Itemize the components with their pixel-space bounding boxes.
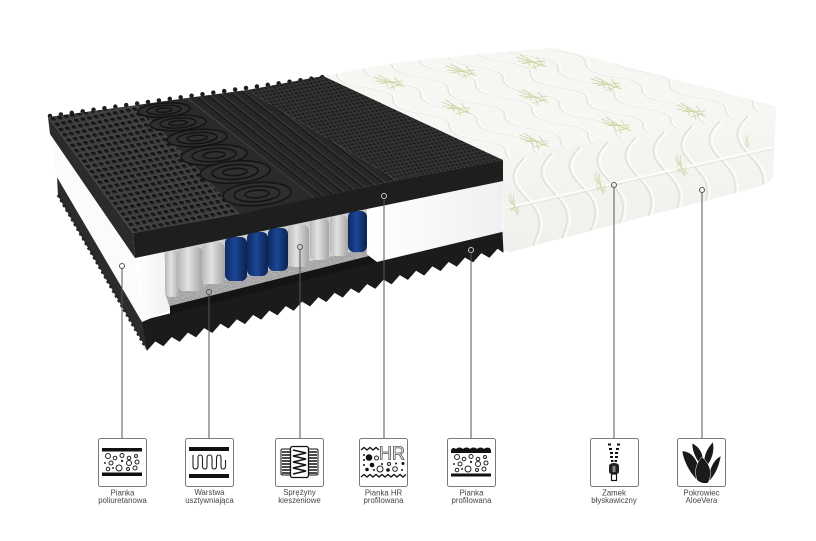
label: Pianka profilowana: profilowana bbox=[452, 496, 492, 505]
label: Warstwa usztywniająca: Warstwa bbox=[194, 488, 225, 497]
white polyurethane foam front block bbox=[136, 252, 170, 322]
callout: polyurethane foam bbox=[120, 264, 124, 438]
label: Zamek błyskawiczny: błyskawiczny bbox=[591, 496, 637, 505]
callout: aloe cover bbox=[700, 188, 704, 438]
callout: zipper bbox=[612, 182, 616, 438]
label: Pianka HR profilowana: Pianka HR bbox=[365, 488, 402, 498]
icon: HR foam bbox=[360, 438, 408, 486]
icon: pocket springs bbox=[276, 438, 324, 486]
label: Pianka poliuretanowa: Pianka bbox=[111, 488, 134, 498]
callout: profiled foam bbox=[468, 248, 474, 438]
icon: aloe vera bbox=[678, 438, 726, 486]
label: Pianka profilowana: Pianka bbox=[460, 488, 483, 498]
white foam right front block bbox=[367, 181, 503, 262]
icon: zipper bbox=[590, 438, 638, 486]
icon: stiffening layer bbox=[186, 438, 234, 486]
egg-crate zone bbox=[48, 105, 240, 233]
fine profiled zone bbox=[247, 76, 503, 180]
aloe vera cover bbox=[320, 45, 780, 252]
label: Sprężyny kieszeniowe: kieszeniowe bbox=[278, 496, 321, 505]
left white polyurethane foam side bbox=[50, 133, 142, 322]
label: Pianka HR profilowana: profilowana bbox=[364, 496, 404, 505]
ring zone bbox=[137, 98, 315, 215]
top surface back bumps bbox=[50, 77, 323, 116]
ribbed zone bbox=[187, 90, 397, 198]
felt stiffening layer bbox=[165, 248, 369, 308]
label: Pokrowiec AloeVera: AloeVera bbox=[686, 496, 718, 505]
icon: HR foam: HR bbox=[379, 444, 405, 464]
spring pocket cavity bbox=[164, 208, 377, 314]
label: Zamek błyskawiczny: Zamek bbox=[602, 488, 626, 498]
top layer left side bbox=[48, 117, 135, 258]
icon: polyurethane foam bbox=[98, 438, 146, 486]
callout: HR foam bbox=[382, 194, 386, 438]
label: Warstwa usztywniająca: usztywniająca bbox=[185, 496, 234, 505]
mattress illustration bbox=[48, 45, 780, 350]
top layer HR foam bbox=[48, 76, 503, 258]
callout: stiffening layer bbox=[206, 290, 212, 438]
bottom profiled foam layer bbox=[57, 177, 503, 350]
top layer front edge bbox=[133, 160, 503, 258]
label: Pianka poliuretanowa: poliuretanowa bbox=[98, 496, 147, 505]
label: Sprężyny kieszeniowe: Sprężyny bbox=[283, 488, 316, 497]
icon: profiled foam bbox=[448, 438, 496, 486]
pocket springs bbox=[165, 211, 367, 297]
callout: pocket springs bbox=[298, 244, 302, 438]
label: Pokrowiec AloeVera: Pokrowiec bbox=[684, 488, 719, 498]
